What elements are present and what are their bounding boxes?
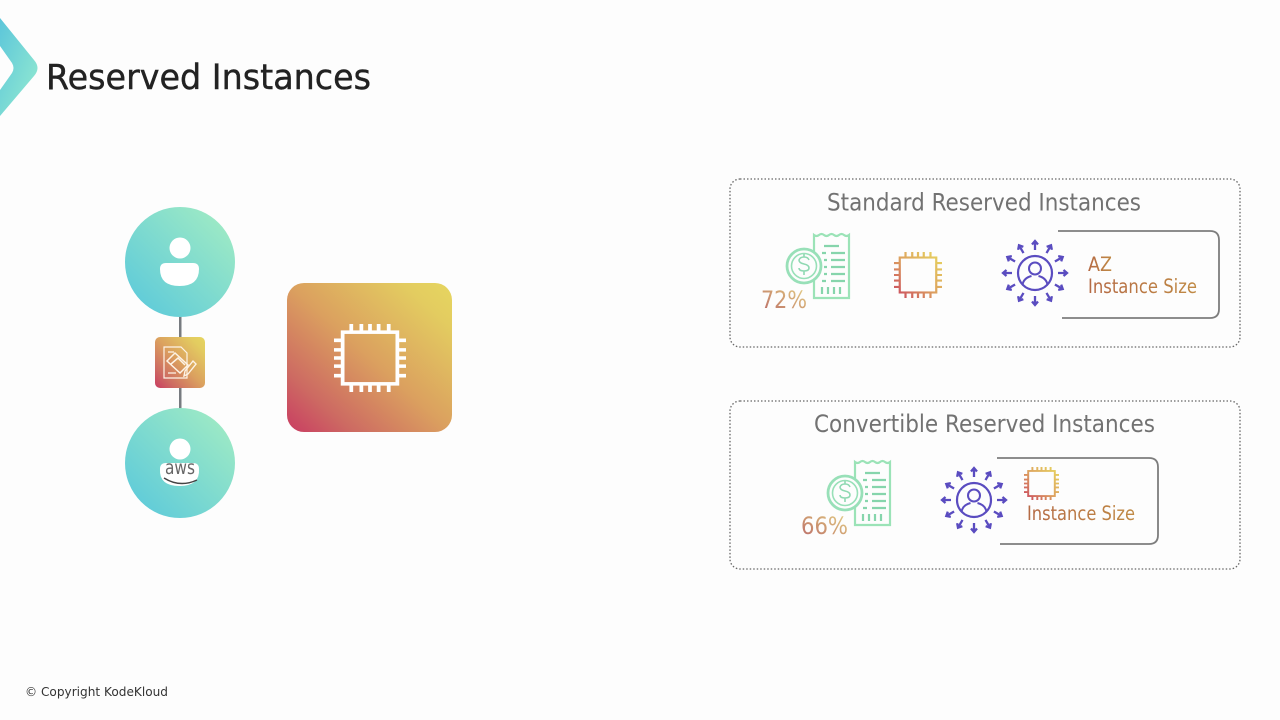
user circle: [125, 207, 235, 317]
icon: savings bill: [787, 234, 849, 298]
AWS circle: [125, 408, 235, 518]
title: Reserved Instances: [46, 58, 371, 98]
scope label: instance size: Instance Size: [1088, 275, 1197, 298]
AWS circle: aws: [165, 457, 195, 479]
icon: user flexibility arrows: [1003, 241, 1067, 305]
instance tile with chip icon: [287, 283, 452, 432]
logo chevron: [0, 18, 38, 116]
contract tile: [155, 337, 205, 388]
icon: instance chip: [894, 252, 942, 298]
bracket: [1058, 231, 1219, 318]
savings 72%: 72%: [761, 286, 807, 314]
panel: convertible reserved instances: [730, 401, 1240, 569]
icon: instance chip: [1024, 467, 1059, 500]
copyright footer: © Copyright KodeKloud: [25, 684, 168, 699]
panel: standard reserved instances: [730, 179, 1240, 347]
heading: standard: Standard Reserved Instances: [827, 188, 1141, 216]
icon: user flexibility arrows: [942, 468, 1006, 532]
icon: savings bill: [828, 461, 890, 525]
savings 66%: 66%: [801, 512, 848, 540]
heading: convertible: Convertible Reserved Instances: [814, 410, 1155, 438]
scope label: instance size: Instance Size: [1027, 502, 1135, 525]
bracket: [997, 458, 1158, 544]
connector lines: [179, 316, 182, 410]
scope label: AZ: AZ: [1088, 253, 1112, 276]
